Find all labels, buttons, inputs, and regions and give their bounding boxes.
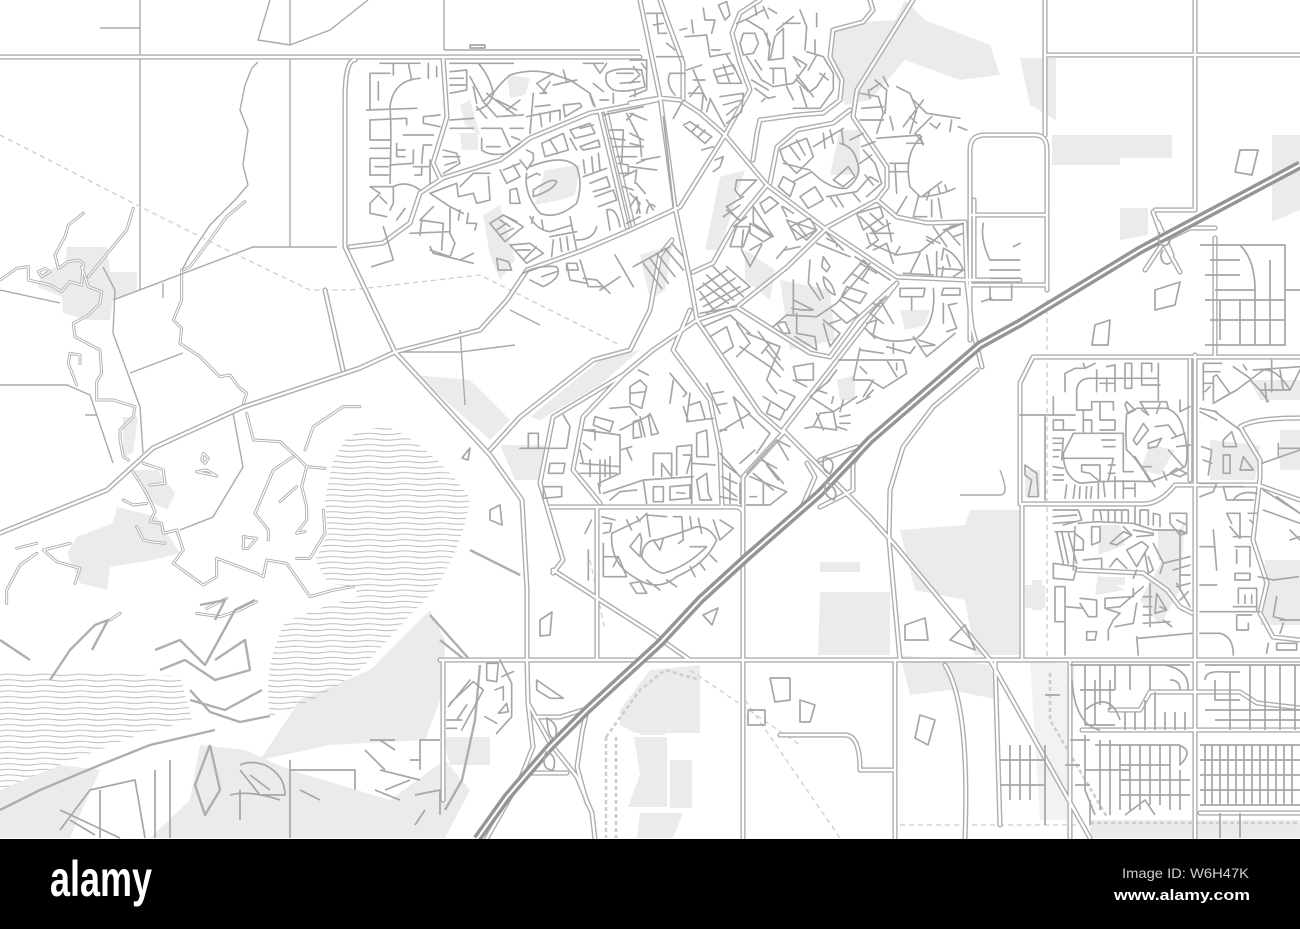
brand wordmark: alamy xyxy=(50,851,152,907)
thin rural lines xyxy=(0,0,1005,530)
residential streets: east-central community xyxy=(697,205,1020,430)
lake with wave hatching xyxy=(0,428,470,790)
footer bar xyxy=(0,839,1300,929)
small ponds and isolated parcels xyxy=(462,45,1258,745)
residential streets: far east and south grid xyxy=(60,245,1300,838)
residential streets: northwest community xyxy=(367,63,683,293)
residential streets: north community xyxy=(630,2,967,250)
residential streets: east community xyxy=(1020,360,1300,655)
residential streets: southwest pockets xyxy=(447,660,563,733)
lower creeks xyxy=(0,550,520,815)
river channels west xyxy=(0,202,360,620)
website: www.alamy.com xyxy=(1113,887,1250,904)
residential streets: south community xyxy=(520,370,790,593)
image id: Image ID: W6H47K xyxy=(1122,865,1250,881)
diagonal highway with interchanges xyxy=(477,165,1300,839)
dashed transmission lines xyxy=(0,135,1300,838)
